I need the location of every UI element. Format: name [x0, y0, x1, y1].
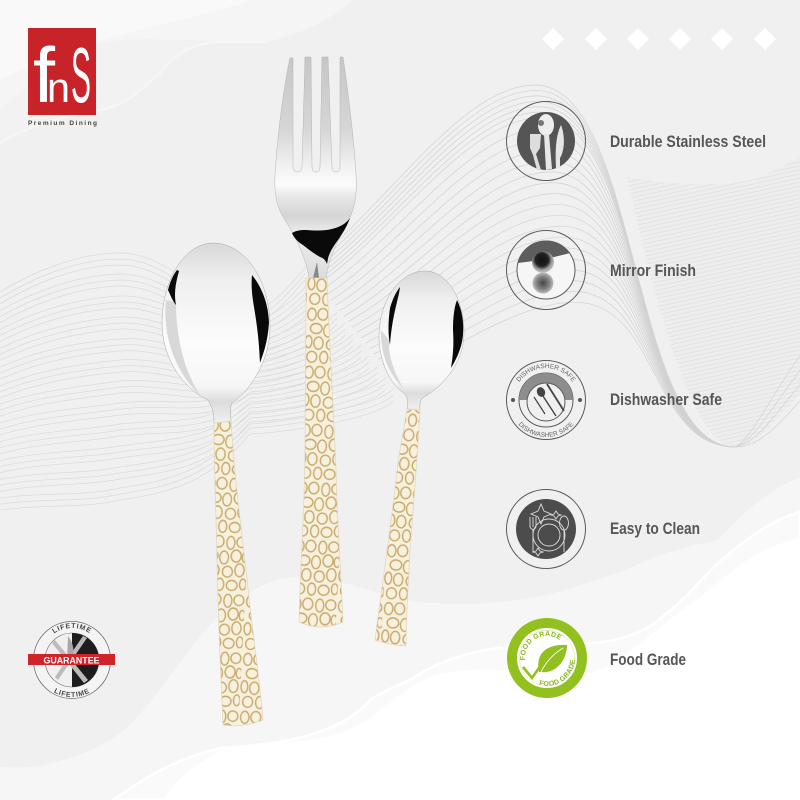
icon: stainless steel cutlery [506, 102, 586, 180]
icon: lifetime guarantee badge: GUARANTEE [44, 655, 100, 665]
wave line pattern [0, 85, 800, 514]
logo: S [71, 31, 91, 119]
logo: f [33, 31, 55, 119]
decorative diamonds [542, 28, 776, 50]
icon: lifetime guarantee badge: LIFETIME [52, 623, 92, 634]
label: dishwasher safe: Dishwasher Safe [610, 391, 722, 409]
label: food grade: Food Grade [610, 651, 686, 669]
label: durable stainless steel: Durable Stainless Steel [610, 133, 766, 151]
icon: dishwasher safe [506, 360, 586, 440]
small spoon [375, 271, 464, 646]
logo: Premium Dining [28, 120, 97, 127]
label: easy to clean: Easy to Clean [610, 520, 700, 538]
icon: food grade [507, 618, 587, 698]
icon: mirror finish [506, 230, 586, 310]
icon: dishwasher safe: DISHWASHER SAFE [516, 363, 576, 382]
icon: lifetime guarantee badge: LIFETIME [54, 688, 90, 697]
icon: easy to clean [506, 490, 586, 568]
fork [275, 57, 356, 627]
icon: food grade: FOOD GRADE [539, 660, 575, 686]
large spoon [162, 243, 270, 726]
logo [28, 28, 97, 127]
icon: lifetime guarantee badge [28, 621, 115, 699]
label: mirror finish: Mirror Finish [610, 262, 696, 280]
icon: dishwasher safe: DISHWASHER SAFE [518, 422, 574, 437]
icon: food grade: FOOD GRADE [520, 631, 562, 660]
logo: n [47, 64, 70, 111]
